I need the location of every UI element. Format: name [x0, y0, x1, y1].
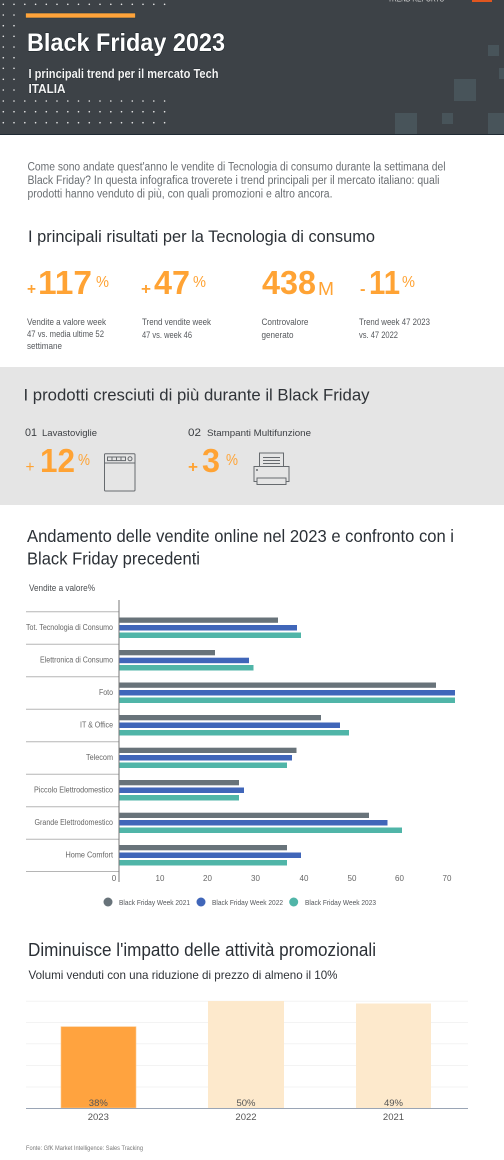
product 1 label: Lavastoviglie: [42, 428, 97, 438]
category: Piccolo Elettrodomestico: [34, 780, 244, 800]
top tag: orange marker: [472, 0, 492, 2]
x axis labels: 30: [251, 874, 260, 883]
column: 2021: 49%: [384, 1098, 404, 1109]
category: Home Comfort: [66, 845, 301, 866]
category: Elettronica di Consumo: Elettronica di Consumo: [40, 656, 113, 664]
x axis labels: 20: [203, 874, 212, 883]
column chart: promotional volumes: [26, 1001, 468, 1123]
stat: +47%: [141, 264, 206, 301]
chart subtitle: Vendite a valore%: [29, 583, 95, 593]
stat description 4: Trend week 47 2023: [359, 317, 430, 327]
x axis labels: 0: [112, 874, 117, 883]
x axis labels: 50: [348, 874, 357, 883]
icon: dishwasher: [104, 454, 135, 491]
stat description 4: [359, 317, 430, 340]
product 1 value: +: [26, 459, 34, 476]
product 1 value: [26, 442, 90, 479]
intro paragraph: Come sono andate quest'anno le vendite di Tecnologia di consumo durante la settimana del: [28, 162, 446, 174]
product 2 label: Stampanti Multifunzione: [207, 428, 311, 438]
column: 2022: [208, 1001, 284, 1123]
stat description 3: Controvalore: [262, 317, 309, 327]
stat description 2: [142, 317, 212, 340]
stat description 2: Trend vendite week: [142, 317, 212, 327]
product 2 value: [188, 442, 238, 479]
stat: +47%: 47: [154, 264, 190, 301]
stat: -11%: %: [402, 274, 415, 291]
product 1 value: 12: [40, 442, 75, 479]
intro paragraph: prodotti hanno venduto di più, con quali promozioni e altro ancora.: [28, 188, 332, 200]
stat: -11%: 11: [369, 264, 400, 301]
stat: 438M: 438: [262, 264, 316, 301]
stat: -11%: -: [360, 281, 366, 298]
category: Foto: Foto: [99, 688, 113, 697]
category: Grande Elettrodomestico: Grande Elettrodomestico: [34, 818, 113, 827]
category: Home Comfort: Home Comfort: [66, 850, 114, 860]
category: Piccolo Elettrodomestico: Piccolo Elettrodomestico: [34, 786, 113, 794]
column: 2021: 2021: [383, 1112, 404, 1123]
category: Tot. Tecnologia di Consumo: [26, 618, 301, 638]
product 2 label: 02: [188, 427, 201, 439]
bar chart: online sales by category: [26, 600, 455, 883]
stat: +47%: %: [193, 274, 206, 291]
product 2 value: 3: [202, 442, 220, 479]
column: 2021: [356, 1004, 431, 1123]
heading: promotions: Diminuisce l'impatto delle attività promozionali: [28, 940, 376, 960]
category: Foto: [99, 682, 455, 703]
stat: +117%: %: [96, 274, 109, 291]
product 2 value: %: [226, 452, 238, 469]
stat: +117%: +: [27, 281, 36, 298]
product 1 label: [25, 427, 97, 439]
heading: online sales: Andamento delle vendite online nel 2023 e confronto con i: [27, 526, 454, 546]
stat: -11%: [360, 264, 415, 301]
product 1 label: 01: [25, 427, 37, 439]
x axis labels: [112, 874, 452, 883]
stat: 438M: M: [318, 279, 334, 299]
stat description 3: generato: [262, 330, 294, 340]
column: 2022: 2022: [235, 1112, 257, 1123]
x axis labels: 60: [395, 874, 404, 883]
heading: key results: I principali risultati per la Tecnologia di consumo: [28, 227, 375, 246]
title: Black Friday 2023: [27, 29, 225, 57]
chart legend: Black Friday Week 2023: [305, 898, 376, 907]
stat description 1: [27, 317, 107, 351]
intro paragraph: [28, 162, 446, 200]
accent bar: [26, 13, 136, 18]
product 1 value: %: [78, 452, 90, 469]
x axis labels: 10: [156, 874, 165, 883]
subtitle country: ITALIA: [28, 82, 66, 96]
category: Telecom: [86, 748, 296, 768]
chart legend: [104, 898, 376, 907]
stat description 1: 47 vs. media ultime 52: [27, 329, 104, 339]
product 2 label: [188, 427, 311, 439]
category: IT & Office: [80, 715, 349, 736]
subtitle: I principali trend per il mercato Tech: [28, 67, 218, 81]
stat: +47%: +: [141, 281, 151, 298]
subheading: promotions: Volumi venduti con una riduzione di prezzo di almeno il 10%: [28, 968, 338, 982]
chart legend: Black Friday Week 2021: [119, 898, 190, 907]
stat: +117%: 117: [38, 264, 92, 301]
column: 2022: 50%: [236, 1098, 256, 1109]
panel: top growing products: [0, 367, 504, 505]
stat description 1: settimane: [27, 341, 62, 351]
category: Grande Elettrodomestico: [34, 813, 402, 833]
category: Telecom: Telecom: [86, 753, 113, 762]
column: 2023: 38%: [89, 1098, 108, 1109]
source note: Fonte: GfK Market Intelligence: Sales Tracking: [26, 1146, 143, 1152]
stat description 2: 47 vs. week 46: [142, 330, 192, 340]
column: 2023: 2023: [88, 1112, 109, 1123]
heading: online sales: Black Friday precedenti: [27, 548, 200, 568]
heading: online sales: [27, 526, 454, 568]
column: 2023: [61, 1027, 136, 1123]
intro paragraph: Black Friday? In questa infografica troverete i trend principali per il mercato italiano: quali: [28, 175, 440, 187]
stat description 1: Vendite a valore week: [27, 317, 107, 327]
x axis labels: 40: [300, 874, 309, 883]
heading: products: I prodotti cresciuti di più durante il Black Friday: [24, 386, 370, 404]
category: IT & Office: IT & Office: [80, 720, 113, 730]
category: Tot. Tecnologia di Consumo: Tot. Tecnologia di Consumo: [26, 623, 113, 632]
stat description 3: [262, 317, 309, 340]
chart legend: Black Friday Week 2022: [212, 898, 283, 907]
stat description 4: vs. 47 2022: [359, 330, 398, 340]
category: Elettronica di Consumo: [40, 650, 254, 670]
product 2 value: +: [188, 459, 198, 476]
icon: printer: [254, 453, 289, 484]
panel: header banner: [0, 0, 504, 135]
x axis labels: 70: [443, 874, 452, 883]
stat: +117%: [27, 264, 109, 301]
